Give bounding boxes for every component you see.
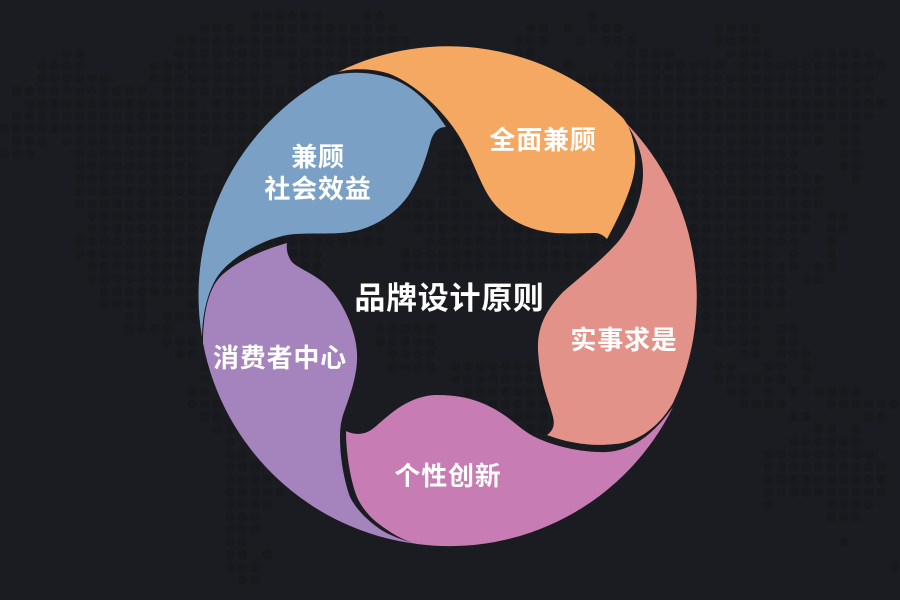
petal: 全面兼顾 (orange) bbox=[338, 46, 635, 239]
petal: 个性创新 (magenta) bbox=[346, 395, 673, 546]
petal: 消费者中心 (purple) bbox=[203, 243, 417, 544]
petal: 个性创新 (magenta): 个性创新 bbox=[394, 461, 502, 491]
petal: 消费者中心 (purple): 消费者中心 bbox=[213, 343, 347, 373]
petal: 实事求是 (salmon): 实事求是 bbox=[570, 325, 678, 355]
center title: 品牌设计原则 bbox=[354, 281, 545, 316]
petal: 兼顾社会效益 (blue): 兼顾 bbox=[291, 142, 345, 172]
petal: 实事求是 (salmon) bbox=[538, 117, 697, 445]
petal: 兼顾社会效益 (blue): 社会效益 bbox=[264, 174, 372, 204]
petal: 全面兼顾 (orange): 全面兼顾 bbox=[489, 125, 597, 155]
petal: 兼顾社会效益 (blue) bbox=[199, 73, 446, 337]
